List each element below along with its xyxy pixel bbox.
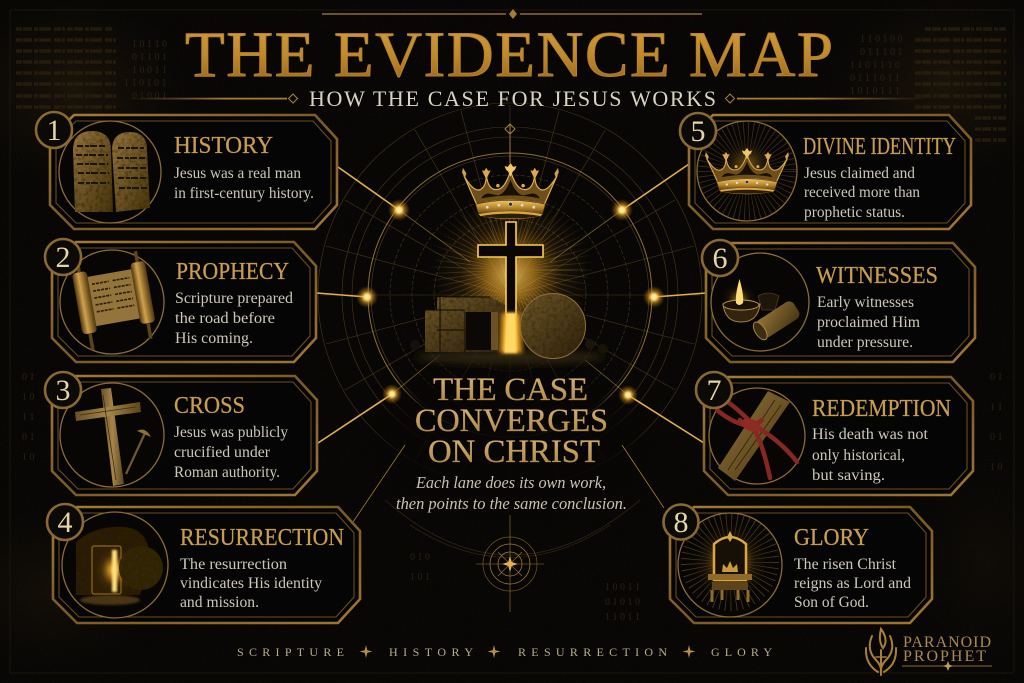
background: 1 0 1 1 0 bbox=[132, 39, 167, 50]
heading: witnesses: WITNESSES bbox=[816, 263, 938, 289]
text: resurrection: and mission. bbox=[180, 594, 259, 611]
badge 3 bbox=[45, 372, 81, 408]
background: 0 1 bbox=[990, 372, 1002, 383]
dark area behind centre text bbox=[360, 352, 660, 528]
background: 0 1 bbox=[990, 432, 1002, 443]
text: glory bbox=[794, 556, 911, 611]
badge 1 bbox=[36, 112, 72, 148]
icon: stone tablets bbox=[73, 131, 150, 212]
background: 1 1 0 1 1 1 0 bbox=[850, 60, 900, 71]
background: 1 1 bbox=[990, 402, 1002, 413]
panel 7: redemption bbox=[696, 372, 973, 495]
background: 0 1 0 0 1 bbox=[132, 91, 167, 102]
background: 1 0 bbox=[22, 392, 34, 403]
icon: oil lamp and scroll bbox=[721, 279, 802, 342]
text: divine identity: prophetic status. bbox=[804, 204, 905, 221]
text: cross: Roman authority. bbox=[174, 464, 280, 481]
badge 6: 6 bbox=[712, 242, 728, 275]
footer keywords: SCRIPTURE bbox=[237, 645, 344, 659]
logo: Paranoid Prophet bbox=[866, 629, 992, 675]
text: prophecy bbox=[175, 290, 293, 347]
badge 4 bbox=[47, 504, 83, 540]
text: glory: The risen Christ bbox=[794, 556, 897, 573]
icon: wood beam with red rope bbox=[717, 391, 797, 481]
badge 6 bbox=[702, 240, 738, 276]
background: 1 0 0 1 1 bbox=[132, 65, 167, 76]
background: 0 1 0 bbox=[410, 552, 430, 563]
text: witnesses: proclaimed Him bbox=[817, 314, 921, 331]
background: 1 1 0 1 1 bbox=[605, 612, 640, 623]
text: prophecy: the road before bbox=[175, 310, 275, 327]
centre heading: THE CASE bbox=[433, 372, 588, 408]
panel 1: history bbox=[36, 112, 337, 229]
compass ornament bbox=[476, 515, 544, 612]
background: 1 1 0 1 0 0 bbox=[860, 34, 902, 45]
logo wordmark: PROPHET bbox=[903, 648, 986, 665]
title: THE EVIDENCE MAP bbox=[185, 19, 833, 91]
top ornament bbox=[505, 124, 515, 163]
text: cross bbox=[174, 424, 288, 481]
text: resurrection bbox=[180, 556, 322, 611]
text: history: in first-century history. bbox=[174, 185, 314, 202]
icon: crown with rays bbox=[705, 135, 789, 197]
heading: history: HISTORY bbox=[174, 133, 273, 159]
centre description: then points to the same conclusion. bbox=[396, 494, 627, 513]
ground bbox=[410, 339, 608, 364]
panel 8: glory bbox=[664, 504, 932, 623]
icon: throne bbox=[692, 524, 768, 602]
background: 1 1 0 1 0 1 bbox=[124, 78, 166, 89]
centre heading: CONVERGES bbox=[415, 403, 608, 439]
cross glow bbox=[433, 197, 589, 353]
light beam bbox=[500, 313, 522, 353]
background: 1 0 1 bbox=[410, 572, 430, 583]
text: divine identity: Jesus claimed and bbox=[804, 165, 915, 182]
text: prophecy: His coming. bbox=[175, 330, 253, 347]
heading: prophecy: PROPHECY bbox=[176, 259, 289, 285]
background: 0 1 1 0 1 bbox=[132, 52, 167, 63]
footer keywords bbox=[237, 645, 772, 659]
background: 0 1 1 1 0 1 bbox=[860, 47, 902, 58]
central illustration: crown, cross, tomb and stone bbox=[410, 124, 608, 364]
title ornament line bbox=[322, 9, 702, 19]
cross bbox=[478, 222, 543, 315]
centre heading: ON CHRIST bbox=[428, 434, 600, 470]
subtitle: HOW THE CASE FOR JESUS WORKS bbox=[309, 86, 716, 111]
badge 5: 5 bbox=[690, 115, 706, 148]
background: 0 1 1 1 0 1 1 bbox=[850, 73, 900, 84]
connector lines and glowing nodes bbox=[317, 164, 706, 522]
text: glory: reigns as Lord and bbox=[794, 575, 911, 592]
logo wordmark bbox=[903, 634, 991, 665]
text: redemption: His death was not bbox=[812, 426, 929, 443]
badge 7 bbox=[696, 372, 732, 408]
panel 2: prophecy bbox=[45, 239, 316, 362]
panel 4: resurrection bbox=[47, 504, 360, 623]
text: cross: Jesus was publicly bbox=[174, 424, 288, 441]
text: witnesses bbox=[817, 294, 921, 351]
text: witnesses: under pressure. bbox=[817, 334, 913, 351]
text: redemption: only historical, bbox=[812, 447, 905, 464]
text: witnesses: Early witnesses bbox=[817, 294, 914, 311]
background: 1 0 bbox=[22, 452, 34, 463]
text: divine identity: received more than bbox=[804, 184, 920, 201]
footer keywords: RESURRECTION bbox=[518, 645, 667, 659]
round stone bbox=[520, 293, 586, 359]
heading: divine identity: DIVINE IDENTITY bbox=[803, 134, 956, 160]
heading: redemption: REDEMPTION bbox=[812, 396, 951, 422]
background: 1 0 0 1 1 bbox=[605, 582, 640, 593]
heading: cross: CROSS bbox=[174, 393, 245, 419]
text: glory: Son of God. bbox=[794, 594, 869, 611]
badge 2: 2 bbox=[56, 241, 70, 274]
centre description: Each lane does its own work, bbox=[415, 473, 606, 492]
badge 8 bbox=[664, 504, 698, 540]
badge 3: 3 bbox=[56, 374, 70, 407]
icon: empty tomb bbox=[76, 527, 163, 605]
icon: scroll bbox=[70, 250, 158, 351]
panel 3: cross bbox=[45, 372, 317, 495]
footer keywords: HISTORY bbox=[389, 645, 473, 659]
text: redemption bbox=[812, 426, 929, 484]
badge 7: 7 bbox=[706, 374, 722, 407]
central radial grid bbox=[318, 103, 702, 558]
background: 1 1 bbox=[22, 412, 34, 423]
background: 0 1 bbox=[22, 432, 34, 443]
background: 1 0 bbox=[990, 462, 1002, 473]
text: prophecy: Scripture prepared bbox=[175, 290, 293, 307]
text: cross: crucified under bbox=[174, 444, 271, 461]
background: 1 0 1 0 1 1 1 bbox=[850, 86, 900, 97]
panel 5: divine identity bbox=[680, 113, 971, 229]
text: resurrection: vindicates His identity bbox=[180, 575, 322, 592]
text: divine identity bbox=[804, 165, 920, 221]
footer keywords: GLORY bbox=[711, 645, 772, 659]
logo emblem bbox=[866, 629, 896, 675]
badge 4: 4 bbox=[58, 506, 72, 539]
centre heading bbox=[415, 372, 608, 470]
icon: wooden cross and nail bbox=[75, 388, 151, 486]
background: 0 1 0 1 0 bbox=[605, 597, 640, 608]
text: resurrection: The resurrection bbox=[180, 556, 287, 573]
text: history: Jesus was a real man bbox=[174, 165, 301, 182]
badge 5 bbox=[680, 113, 716, 149]
badge 1: 1 bbox=[46, 114, 62, 147]
subtitle bbox=[130, 86, 925, 111]
text: history bbox=[174, 165, 314, 202]
crown bbox=[462, 163, 559, 219]
heading: glory: GLORY bbox=[794, 525, 869, 551]
logo wordmark: PARANOID bbox=[903, 634, 991, 651]
centre description bbox=[396, 473, 627, 513]
text: redemption: but saving. bbox=[812, 467, 885, 484]
tomb bbox=[425, 297, 505, 352]
panel 6: witnesses bbox=[702, 240, 975, 362]
background: 0 1 bbox=[22, 372, 34, 383]
badge 2 bbox=[45, 239, 81, 275]
badge 8: 8 bbox=[674, 506, 688, 539]
heading: resurrection: RESURRECTION bbox=[180, 525, 344, 551]
